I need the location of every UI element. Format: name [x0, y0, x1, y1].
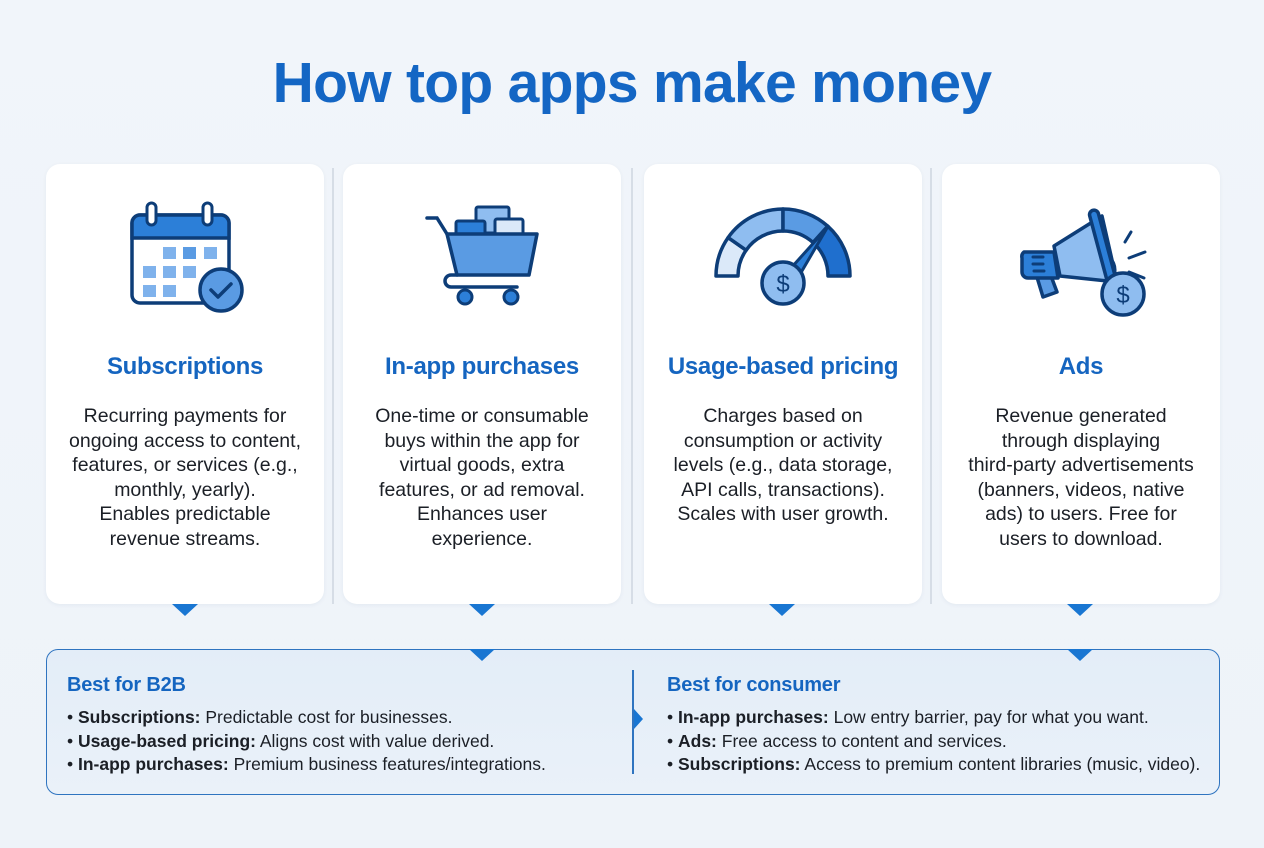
text block: experience. — [432, 528, 532, 550]
text block: third-party advertisements — [968, 454, 1194, 476]
text block: features, or services (e.g., — [72, 454, 298, 476]
text block: B2B: Best for B2B — [67, 674, 186, 696]
icon: gauge: $ — [776, 271, 790, 298]
text block: consumer: • Ads: Free access to content and services. — [667, 730, 1007, 750]
text block: B2B: • In-app purchases: Premium business features/integrations. — [67, 754, 546, 774]
icon: megaphone: $ — [1116, 282, 1130, 309]
text block: One-time or consumable — [375, 405, 589, 427]
text block: consumption or activity — [684, 430, 882, 452]
text block: users to download. — [999, 528, 1163, 550]
text block: API calls, transactions). — [681, 478, 885, 500]
text block: consumer — [667, 674, 1200, 774]
panel: subscriptions — [46, 164, 324, 604]
heading: Subscriptions — [107, 353, 263, 380]
text block — [674, 405, 892, 525]
text block: Charges based on — [703, 405, 863, 427]
heading: In-app purchases — [385, 353, 579, 380]
text block: ads) to users. Free for — [985, 503, 1177, 525]
text block: B2B: • Subscriptions: Predictable cost for businesses. — [67, 707, 452, 727]
text block: consumer: Best for consumer — [667, 674, 840, 696]
text block: through displaying — [1002, 430, 1160, 452]
text block — [968, 405, 1194, 550]
title: How top apps make money — [273, 51, 991, 115]
text block: levels (e.g., data storage, — [674, 454, 892, 476]
icon: megaphone — [1020, 208, 1146, 317]
text block: Recurring payments for — [84, 405, 286, 427]
panel: in-app purchases — [343, 164, 621, 604]
text block: Revenue generated — [995, 405, 1167, 427]
icon: gauge — [714, 207, 852, 306]
text block: features, or ad removal. — [379, 478, 585, 500]
text block: Enhances user — [417, 503, 547, 525]
text block: Enables predictable — [99, 503, 271, 525]
panel: best for — [46, 649, 1220, 795]
panel: ads — [942, 164, 1220, 604]
text block: monthly, yearly). — [114, 478, 256, 500]
text block: revenue streams. — [110, 528, 260, 550]
text block: ongoing access to content, — [69, 430, 301, 452]
heading: Usage-based pricing — [668, 353, 898, 380]
text block — [375, 405, 589, 550]
text block: B2B — [67, 674, 546, 774]
icon: calendar — [130, 202, 244, 313]
text block: buys within the app for — [384, 430, 580, 452]
text block: consumer: • In-app purchases: Low entry barrier, pay for what you want. — [667, 707, 1149, 727]
text block: (banners, videos, native — [977, 478, 1185, 500]
text block: virtual goods, extra — [400, 454, 564, 476]
divider arrow — [632, 670, 643, 774]
text block: B2B: • Usage-based pricing: Aligns cost with value derived. — [67, 730, 494, 750]
heading: Ads — [1059, 353, 1103, 380]
icon: cart — [425, 206, 539, 306]
panel: usage-based pricing — [644, 164, 922, 604]
text block — [69, 405, 301, 550]
text block: Scales with user growth. — [677, 503, 889, 525]
arrows: card pointers — [172, 604, 1093, 616]
text block: consumer: • Subscriptions: Access to premium content libraries (music, video). — [667, 754, 1200, 774]
